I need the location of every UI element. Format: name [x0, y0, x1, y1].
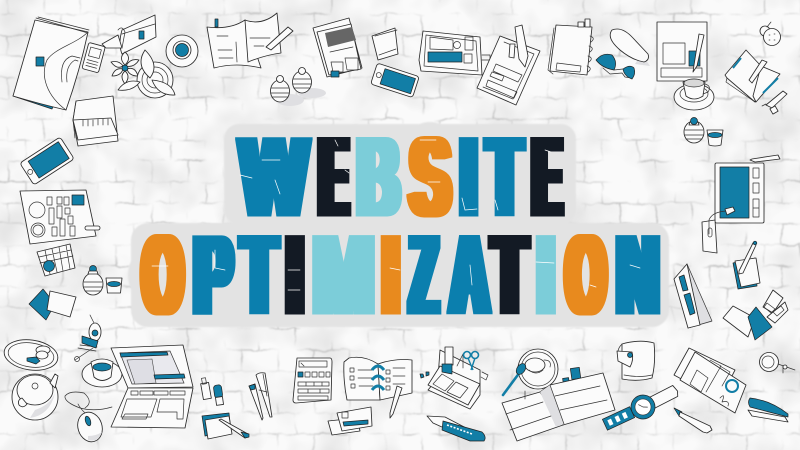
title line 2: OPTIMIZATION: I [383, 211, 399, 338]
icon: cup and saucer with spoon [503, 349, 558, 395]
icon: spiral book [73, 96, 118, 146]
title line 2: OPTIMIZATION: I [538, 211, 554, 338]
icon: laptop [111, 345, 193, 428]
icon: computer mouse [65, 392, 112, 445]
icon: coffee cup blue [82, 359, 122, 387]
icon: tablet right [715, 163, 764, 223]
icon: desk organizer [420, 347, 488, 409]
icon: glasses case [610, 29, 650, 66]
icon: blue phone left [20, 137, 74, 185]
icon: ring notebook [548, 19, 593, 75]
title line 2: OPTIMIZATION: I [287, 211, 303, 338]
icon: tent card [674, 264, 712, 328]
title line 2: OPTIMIZATION: O [143, 213, 182, 338]
icon: open notebook with pen [207, 13, 293, 68]
icon: documents with ring [674, 348, 746, 413]
icon: mp3 player [82, 42, 105, 73]
title line 1: WEBSITE [241, 113, 560, 241]
icon: business cards [328, 407, 372, 435]
title line 1: WEBSITE: E [320, 113, 347, 239]
icon: calculator [293, 358, 332, 403]
icon: pen on tablet [750, 155, 780, 162]
icon: coffee cup [166, 35, 198, 67]
icon: bottle and cup right [684, 118, 723, 146]
icon: plate with food [2, 336, 60, 374]
icon: potted plant [118, 50, 175, 98]
icon: blue glasses [596, 54, 635, 79]
icon: wallet [617, 341, 655, 380]
icon: bottle and cup left [83, 266, 122, 295]
icon: cards right [723, 290, 788, 340]
icon: pen bottom right [674, 408, 712, 433]
icon: briefcase [102, 15, 156, 54]
title line 2: OPTIMIZATION: Z [411, 211, 436, 337]
icon: wristwatch [600, 380, 683, 436]
title line 2: OPTIMIZATION: N [617, 211, 658, 338]
icon: tablet top [419, 31, 490, 75]
icon: large open book [502, 367, 615, 441]
title line 1: WEBSITE: S [411, 115, 450, 241]
icon: planner sheet [20, 190, 100, 244]
icon: cards with pen [202, 413, 249, 439]
icon: flower [111, 52, 139, 84]
icon: buttons with key [760, 22, 780, 46]
icon: clipboard with pencil [477, 25, 540, 105]
icon: marker [762, 91, 787, 114]
icon: small card [372, 28, 398, 60]
icon: teapot [12, 374, 58, 420]
icon: coffee cup top right [674, 79, 714, 110]
icon: utility cutter [427, 416, 485, 441]
title line 1: WEBSITE: E [534, 113, 560, 239]
title line 2: OPTIMIZATION: O [567, 212, 605, 338]
icon: keys [74, 315, 101, 362]
icon: smartphone [371, 63, 419, 98]
icon: note with pen [733, 241, 760, 289]
icon: desk lamp [702, 207, 735, 253]
title backing panel [128, 122, 669, 327]
title line 1: WEBSITE: W [241, 113, 307, 240]
icon: pen by planner [390, 386, 402, 418]
icon: usb drives [201, 378, 224, 405]
title line 2: OPTIMIZATION: T [493, 212, 526, 338]
title line 1: WEBSITE: I [461, 113, 476, 240]
title line 2: OPTIMIZATION: T [242, 212, 276, 338]
icon: pen and pencil [249, 373, 272, 420]
icon: note cards left [29, 289, 76, 320]
title line 2: OPTIMIZATION: M [313, 213, 374, 339]
title line 2: OPTIMIZATION: P [195, 212, 231, 338]
icon: ring planner [344, 357, 412, 400]
icon: open notebook top right [725, 50, 780, 102]
title line 1: WEBSITE: T [488, 114, 521, 240]
icon: two bottles [270, 68, 326, 106]
icon: sheet with pen [657, 22, 707, 81]
icon: key ring right [760, 352, 795, 373]
title line 2: OPTIMIZATION: A [451, 212, 488, 338]
title line 1: WEBSITE: B [358, 113, 399, 239]
title line 2: OPTIMIZATION [143, 211, 658, 339]
icon: paper document stack [313, 18, 362, 77]
icon: stapler [748, 398, 788, 422]
icon: folder bag [13, 17, 89, 110]
icon: calendar [37, 244, 75, 276]
